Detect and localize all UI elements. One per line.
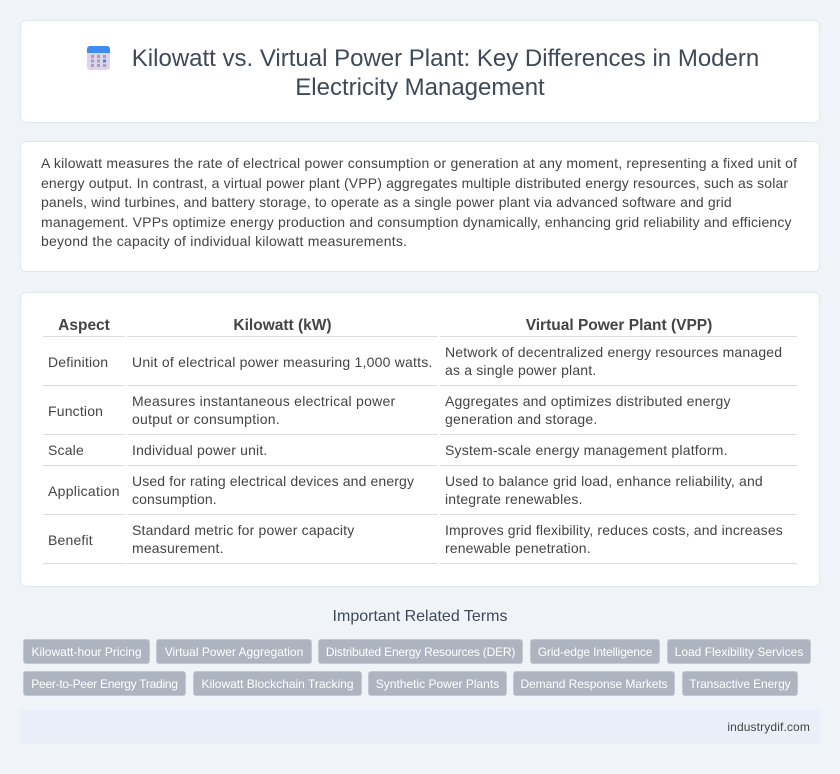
row: function — [48, 393, 731, 427]
table header: Aspect — [58, 317, 110, 334]
row: definition: Definition — [48, 354, 108, 370]
footer bar — [20, 710, 820, 744]
comparison table — [43, 317, 797, 564]
intro text: panels, wind turbines, and battery storage, to operate as a single power plant via advanced software and grid — [41, 194, 732, 210]
row: function: generation and storage. — [445, 411, 598, 427]
row: application — [48, 473, 763, 507]
related term chips — [23, 639, 811, 696]
intro text: energy output. In contrast, a virtual power plant (VPP) aggregates multiple distributed energy resources, such as solar — [41, 175, 788, 191]
row: benefit: measurement. — [132, 540, 224, 556]
row: application: Used for rating electrical devices and energy — [132, 473, 414, 489]
row: definition: Network of decentralized energy resources managed — [445, 344, 782, 360]
chip — [193, 671, 362, 696]
footer source: industrydif.com — [727, 720, 810, 734]
chip: Load Flexibility Services — [675, 645, 803, 659]
chip: Virtual Power Aggregation — [165, 645, 303, 659]
chip: Kilowatt Blockchain Tracking — [201, 677, 354, 691]
header panel — [20, 20, 820, 123]
row: scale: System-scale energy management platform. — [445, 442, 728, 458]
row: function: Function — [48, 402, 103, 418]
panel: introduction — [20, 141, 820, 272]
row: function: Aggregates and optimizes distributed energy — [445, 393, 731, 409]
chip: Distributed Energy Resources (DER) — [326, 645, 515, 659]
title: Kilowatt vs. Virtual Power Plant: Key Differences in Modern — [132, 45, 759, 72]
intro text: beyond the capacity of individual kilowatt measurements. — [41, 233, 407, 249]
row: benefit: Benefit — [48, 532, 93, 548]
chip: Transactive Energy — [689, 677, 791, 691]
row: benefit — [48, 522, 783, 556]
chip — [318, 639, 523, 664]
row: application: Application — [48, 482, 120, 498]
row: definition — [48, 344, 782, 378]
chip — [156, 639, 312, 664]
chip — [682, 671, 798, 696]
chip — [667, 639, 811, 664]
table header: Kilowatt (kW) — [233, 317, 332, 334]
chip — [530, 639, 660, 664]
row: benefit: renewable penetration. — [445, 540, 591, 556]
chip: Demand Response Markets — [520, 677, 668, 691]
row: application: Used to balance grid load, enhance reliability, and — [445, 473, 763, 489]
chip — [23, 671, 186, 696]
intro text: management. VPPs optimize energy production and consumption dynamically, enhancing grid reliability and efficiency — [41, 214, 792, 230]
intro text: A kilowatt measures the rate of electrical power consumption or generation at any moment, representing a fixed unit of — [41, 155, 797, 171]
row: benefit: Improves grid flexibility, reduces costs, and increases — [445, 522, 783, 538]
chip: Kilowatt-hour Pricing — [31, 645, 142, 659]
panel: comparison table — [20, 292, 820, 587]
chip — [368, 671, 507, 696]
icon: calendar grid — [87, 46, 110, 70]
table header: Virtual Power Plant (VPP) — [526, 317, 712, 334]
heading: related terms: Important Related Terms — [333, 608, 507, 625]
row: scale: Scale — [48, 442, 84, 458]
chip — [23, 639, 150, 664]
title: Electricity Management — [295, 74, 545, 101]
row: definition: as a single power plant. — [445, 362, 596, 378]
chip: Synthetic Power Plants — [376, 677, 499, 691]
row: application: integrate renewables. — [445, 491, 583, 507]
row: definition: Unit of electrical power measuring 1,000 watts. — [132, 354, 433, 370]
intro text — [41, 155, 798, 249]
row: application: consumption. — [132, 491, 217, 507]
chip — [513, 671, 675, 696]
row: scale: Individual power unit. — [132, 442, 267, 458]
row: scale — [48, 442, 728, 458]
table header — [58, 317, 712, 334]
row: function: output or consumption. — [132, 411, 280, 427]
row: benefit: Standard metric for power capacity — [132, 522, 354, 538]
chip: Grid-edge Intelligence — [538, 645, 652, 659]
chip: Peer-to-Peer Energy Trading — [31, 677, 178, 691]
row: function: Measures instantaneous electrical power — [132, 393, 395, 409]
title — [132, 45, 759, 101]
